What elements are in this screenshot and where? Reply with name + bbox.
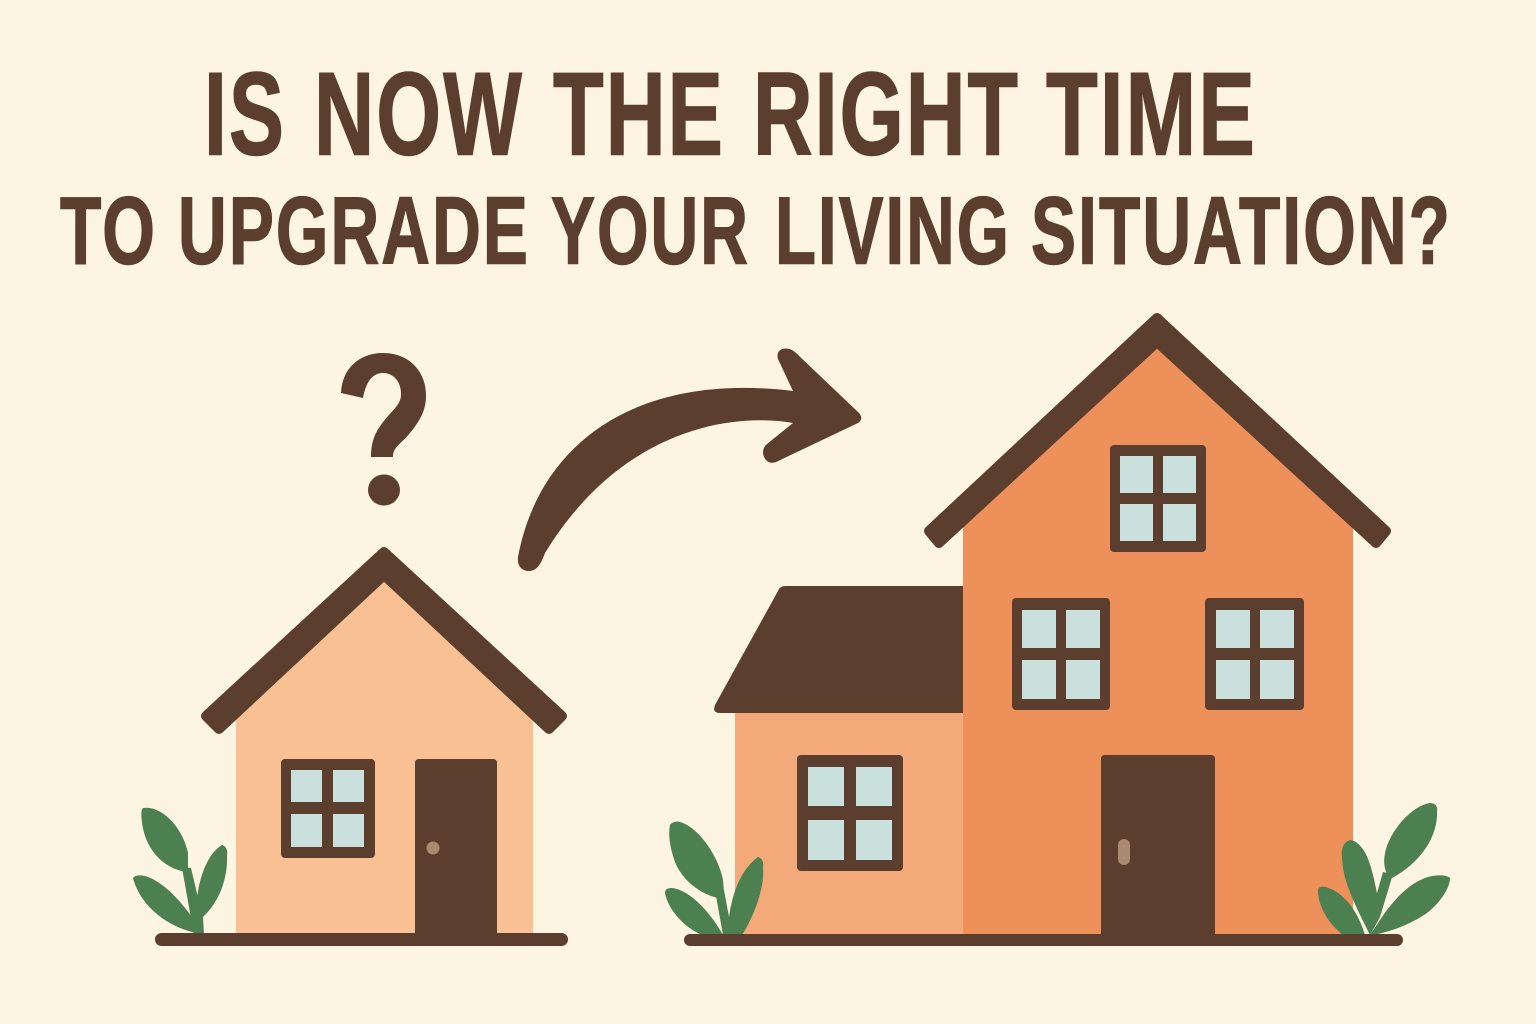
small house roof bbox=[206, 552, 562, 729]
small house bbox=[206, 552, 562, 934]
title line 2 bbox=[60, 178, 1452, 284]
annex window bbox=[797, 755, 903, 871]
title line 1 bbox=[204, 48, 1257, 180]
plant: small house bbox=[133, 808, 227, 935]
icon: question mark bbox=[341, 353, 426, 506]
main wall bbox=[963, 340, 1353, 934]
annex wall bbox=[735, 705, 967, 934]
small house wall bbox=[236, 575, 533, 934]
small house door bbox=[415, 759, 497, 934]
annex roof bbox=[714, 586, 963, 713]
large house door bbox=[1101, 755, 1215, 934]
title line 1: NOW bbox=[314, 48, 524, 180]
title line 2: YOUR bbox=[551, 178, 750, 284]
small house window bbox=[281, 759, 375, 858]
plant: large house left bbox=[665, 822, 763, 935]
middle right window bbox=[1205, 598, 1304, 710]
middle left window bbox=[1012, 598, 1110, 710]
title bbox=[60, 48, 1452, 284]
main roof bbox=[929, 318, 1386, 543]
title line 1: IS bbox=[204, 48, 286, 180]
title line 2: LIVING bbox=[775, 178, 1011, 284]
title line 1: THE bbox=[553, 48, 725, 180]
plant: large house right bbox=[1318, 803, 1450, 935]
title line 2: UPGRADE bbox=[178, 178, 530, 284]
top window bbox=[1110, 445, 1206, 552]
large house bbox=[714, 318, 1386, 934]
title line 1: RIGHT bbox=[753, 48, 1020, 180]
title line 2: TO bbox=[60, 178, 157, 284]
small house ground line bbox=[155, 933, 568, 946]
arrow: small house to large house bbox=[518, 348, 861, 571]
title line 1: TIME bbox=[1046, 48, 1257, 180]
large house ground line bbox=[684, 934, 1403, 946]
